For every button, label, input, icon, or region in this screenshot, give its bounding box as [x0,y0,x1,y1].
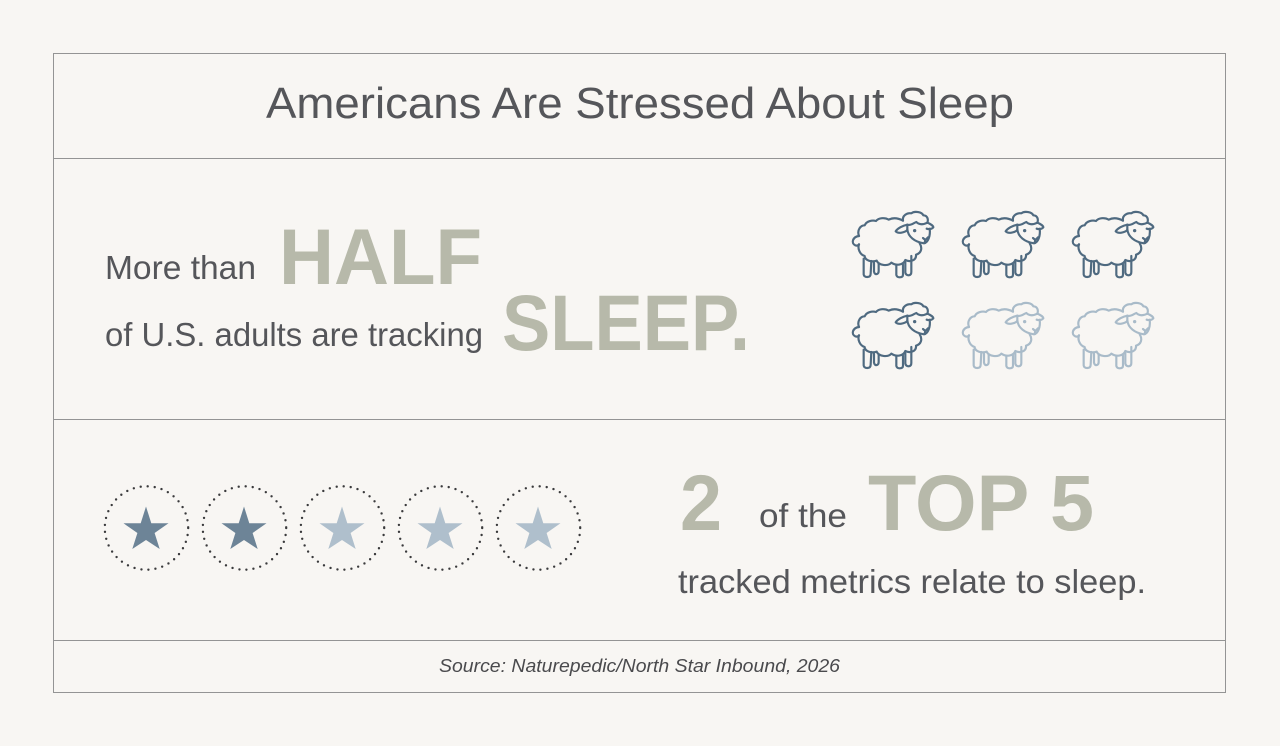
icon: star 2 [203,486,286,570]
icon: sheep 6 faded [1073,303,1153,368]
title: Americans Are Stressed About Sleep [266,79,1014,128]
stat: top 5: TOP 5 [868,458,1094,547]
panel frame with dividers [54,54,1226,692]
icon: sheep 1 [853,212,933,277]
icon: star 4 faded [399,486,482,570]
icon: star 3 faded [301,486,384,570]
icon: sheep 5 faded [963,303,1043,368]
text: more than: More than [105,249,256,286]
icon group: five stars [105,486,580,570]
text: of U.S. adults are tracking: of U.S. adults are tracking [105,316,483,353]
stat: sleep: SLEEP. [502,278,750,367]
stat: half: HALF [279,212,482,301]
stat: 2: 2 [680,458,722,547]
icon: star 5 faded [497,486,580,570]
icon group: six sheep [853,212,1153,368]
text: tracked metrics: tracked metrics relate to sleep. [678,563,1146,600]
icon: sheep 2 [963,212,1043,277]
source note: Source: Naturepedic/North Star Inbound, 2026 [439,656,841,676]
icon: sheep 3 [1073,212,1153,277]
icon: star 1 [105,486,188,570]
panel: top tracked metrics [678,458,1146,600]
icon: sheep 4 [853,303,933,368]
text: of the: of the [759,497,847,534]
panel: half of adults track sleep [105,212,750,367]
